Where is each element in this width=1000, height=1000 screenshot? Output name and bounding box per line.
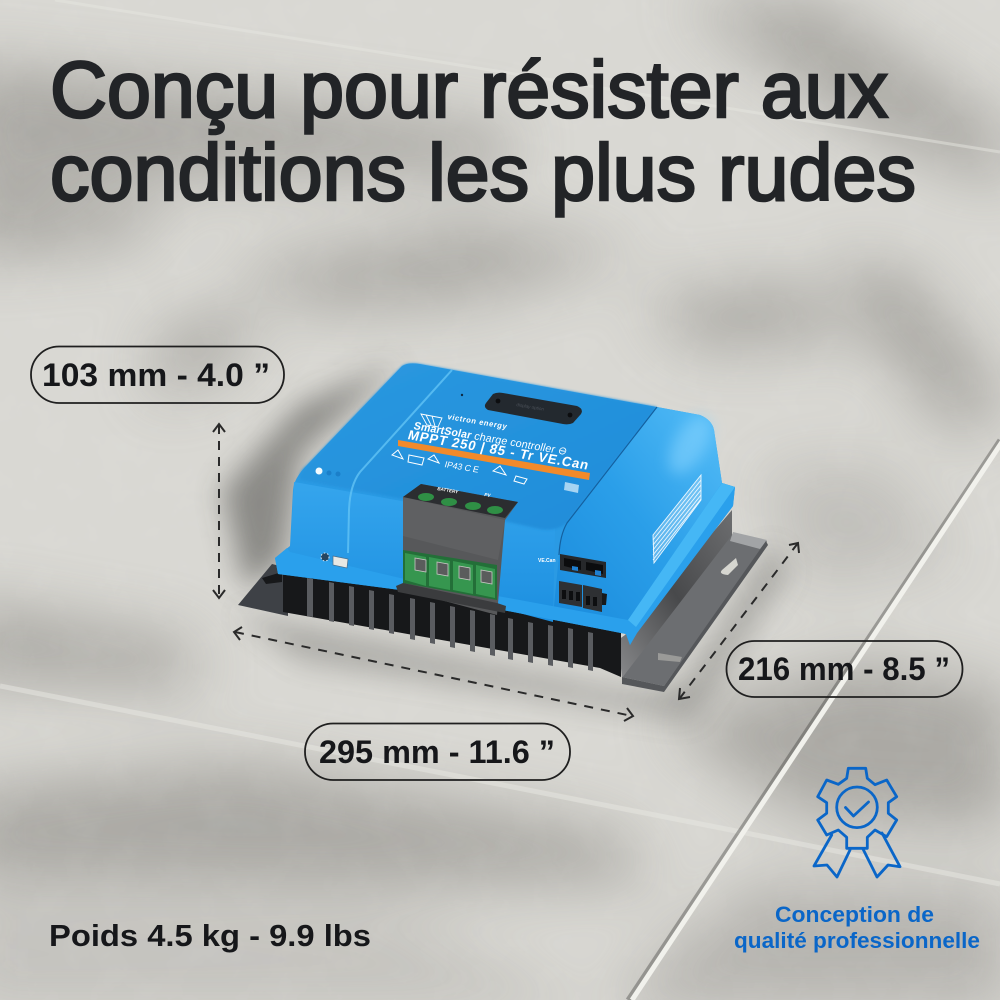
product label text: SmartSolar charge controller ⊖ [412, 420, 569, 458]
terminal block [396, 484, 518, 615]
status LEDs [316, 468, 340, 476]
dimension arrow: height [213, 424, 225, 598]
quality caption [734, 902, 980, 953]
right mounting bracket [618, 510, 768, 692]
title: conditions les plus rudes [50, 128, 916, 217]
USB port [321, 553, 348, 568]
front face [290, 482, 555, 622]
product: MPPT solar charge controller [222, 362, 790, 720]
victron logo [421, 414, 442, 427]
top face [300, 363, 657, 530]
dimension arrow: width [679, 543, 799, 699]
base lip [275, 483, 735, 645]
label: height: 103 mm - 4.0 ” [42, 357, 270, 393]
heat sink [283, 562, 621, 677]
dimension arrow: length [234, 627, 633, 721]
quality caption: Conception de [775, 902, 934, 927]
label: height [31, 346, 284, 403]
orange band [398, 440, 590, 480]
vent label [653, 475, 701, 563]
display option plate: display option [516, 402, 545, 412]
label: length [305, 724, 570, 780]
icon: quality gear badge [814, 768, 900, 877]
label: length: 295 mm - 11.6 ” [319, 734, 555, 770]
weight text: Poids 4.5 kg - 9.9 lbs [49, 918, 371, 953]
title: Conçu pour résister aux [50, 45, 888, 134]
label: width: 216 mm - 8.5 ” [738, 651, 950, 687]
product label text: victron energy [446, 412, 509, 431]
blue housing [275, 363, 735, 645]
VE.Can ports and relay terminals: VE.Can [538, 558, 556, 564]
product label text [392, 412, 590, 493]
title [50, 45, 916, 217]
quality caption: qualité professionnelle [734, 928, 980, 953]
left seam [348, 370, 452, 553]
terminal block: PV [484, 492, 492, 498]
terminal block: BATTERY [437, 486, 460, 495]
product label text: MPPT 250 | 85 - Tr VE.Can [406, 427, 590, 473]
silhouette [275, 363, 735, 645]
display option plate [485, 393, 582, 424]
product label text: IP43 C E [443, 459, 480, 475]
device cast shadow [222, 362, 790, 720]
VE.Can ports and relay terminals [538, 554, 607, 612]
green connector [403, 550, 497, 600]
left mounting bracket [238, 564, 288, 616]
label: width [726, 641, 962, 697]
right end cap [553, 407, 722, 622]
